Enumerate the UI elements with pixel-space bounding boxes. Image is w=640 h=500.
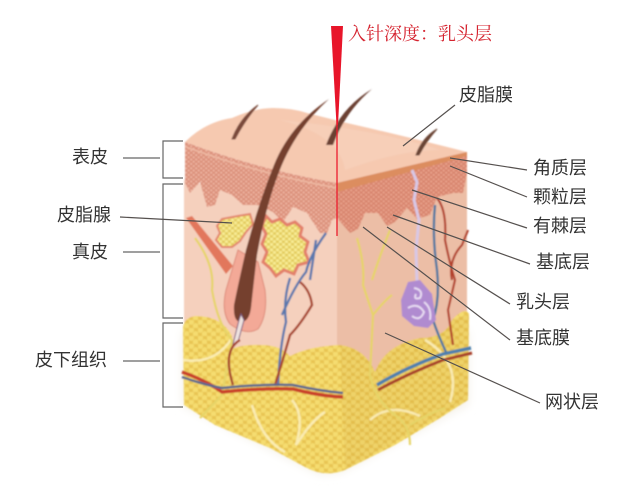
panel: dermis left face (184, 180, 337, 385)
right vertical vessels (433, 205, 446, 352)
panel: epidermis right (337, 152, 467, 233)
right red vessels (437, 198, 468, 345)
fat block (183, 311, 469, 473)
main vessel left (182, 372, 343, 397)
granular line left (186, 147, 337, 188)
bracket: epidermis (123, 141, 183, 178)
main vessel right (377, 348, 472, 390)
red artery (378, 353, 472, 390)
red artery (182, 372, 343, 397)
small hair three (416, 129, 437, 155)
label: hypodermis: 皮下组织 (35, 350, 107, 370)
yellow nerves (195, 230, 445, 445)
label: papillary layer: 乳头层 (516, 292, 570, 312)
bracket: dermis (123, 184, 183, 318)
left labels (35, 141, 232, 407)
label: dermis: 真皮 (72, 242, 108, 262)
main hair with root (234, 99, 329, 322)
hair bulb papilla (232, 314, 244, 348)
label: sebaceous gland: 皮脂腺 (57, 205, 111, 225)
soft shadow (183, 330, 468, 474)
label: spinous layer: 有棘层 (533, 216, 587, 236)
leader: basement membrane (363, 227, 510, 340)
panel: subcutaneous fat (183, 311, 469, 473)
small hair two (326, 89, 372, 145)
hair follicle (224, 250, 266, 332)
sebaceous gland right (262, 216, 309, 276)
arrector muscle (186, 216, 233, 274)
bracket: hypodermis (123, 323, 183, 407)
panel: epidermis left (185, 142, 337, 233)
leader: papillary layer (387, 227, 510, 304)
fat lobe outlines (183, 338, 453, 452)
blue vein (182, 377, 343, 393)
highlight on surface (280, 120, 440, 170)
label: stratum corneum: 角质层 (533, 158, 587, 178)
blood vessel blue left (278, 233, 326, 385)
leader: basal layer (393, 215, 530, 264)
gland coils (408, 288, 430, 320)
right labels (363, 85, 599, 412)
gland body (401, 280, 436, 328)
needle (331, 26, 343, 236)
shaded right fat face (340, 314, 469, 470)
sweat gland (401, 280, 436, 328)
sebaceous gland left (216, 214, 253, 247)
callout: needle depth: 入针深度：乳头层 (348, 24, 492, 44)
label: basement membrane: 基底膜 (516, 328, 570, 348)
needle tip line (336, 120, 338, 236)
leader: sebaceous gland (120, 217, 232, 223)
leader: sebum film (403, 105, 455, 146)
panel: stratum corneum surface (185, 108, 467, 183)
label: granular layer: 颗粒层 (533, 187, 587, 207)
sweat duct (412, 170, 419, 282)
blue vein (377, 348, 471, 385)
needle wedge (331, 26, 343, 125)
leader: stratum corneum (450, 158, 527, 170)
panel: dermis right face (337, 170, 467, 385)
leader: granular layer (450, 166, 527, 197)
blood vessel red left (229, 282, 312, 385)
label: basal layer: 基底层 (536, 252, 590, 272)
label: reticular layer: 网状层 (545, 392, 599, 412)
granular layer band right (337, 152, 467, 192)
label: sebum film: 皮脂膜 (459, 85, 513, 105)
skin block artwork (182, 26, 472, 474)
small hair one (232, 105, 258, 139)
leader: reticular layer (385, 333, 540, 403)
leader: spinous layer (412, 190, 527, 228)
label: epidermis: 表皮 (72, 147, 108, 167)
